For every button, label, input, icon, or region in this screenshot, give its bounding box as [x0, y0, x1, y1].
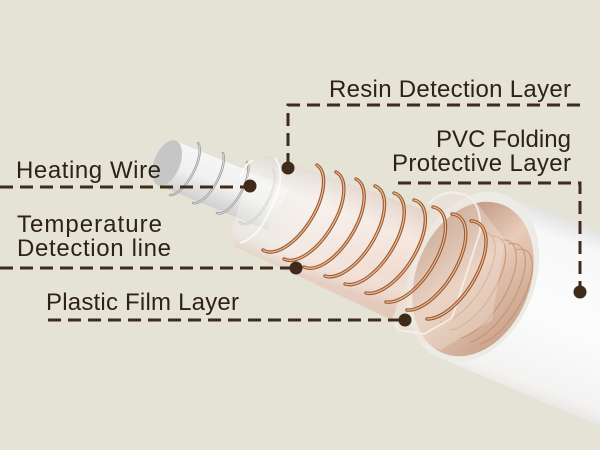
callout: Resin Detection Layer: Resin Detection Layer — [329, 76, 571, 103]
transparent resin sleeve — [231, 156, 430, 320]
outer white PVC tube — [383, 172, 600, 426]
callout: Temperature Detection line: Detection line — [17, 235, 171, 262]
callout: Heating Wire — [0, 157, 256, 192]
core white cylinder — [146, 136, 290, 230]
callout: PVC Folding Protective Layer: Protective Layer — [392, 150, 571, 177]
heating wire spiral — [170, 143, 275, 224]
callout: Plastic Film Layer — [46, 289, 412, 326]
transparent collar — [388, 192, 505, 350]
callout: Heating Wire: Heating Wire — [16, 157, 161, 184]
callout: Temperature Detection line: Temperature — [17, 211, 162, 238]
inner coils seen through the sleeve — [440, 232, 532, 344]
callout: PVC Folding Protective Layer — [392, 126, 586, 298]
callout: Plastic Film Layer: Plastic Film Layer — [46, 289, 239, 316]
hose illustration — [146, 136, 600, 426]
callout: Temperature Detection line — [0, 211, 302, 274]
copper temperature detection coil — [263, 165, 486, 319]
callout: Resin Detection Layer — [282, 76, 580, 174]
callout: PVC Folding Protective Layer: PVC Folding — [436, 126, 571, 153]
